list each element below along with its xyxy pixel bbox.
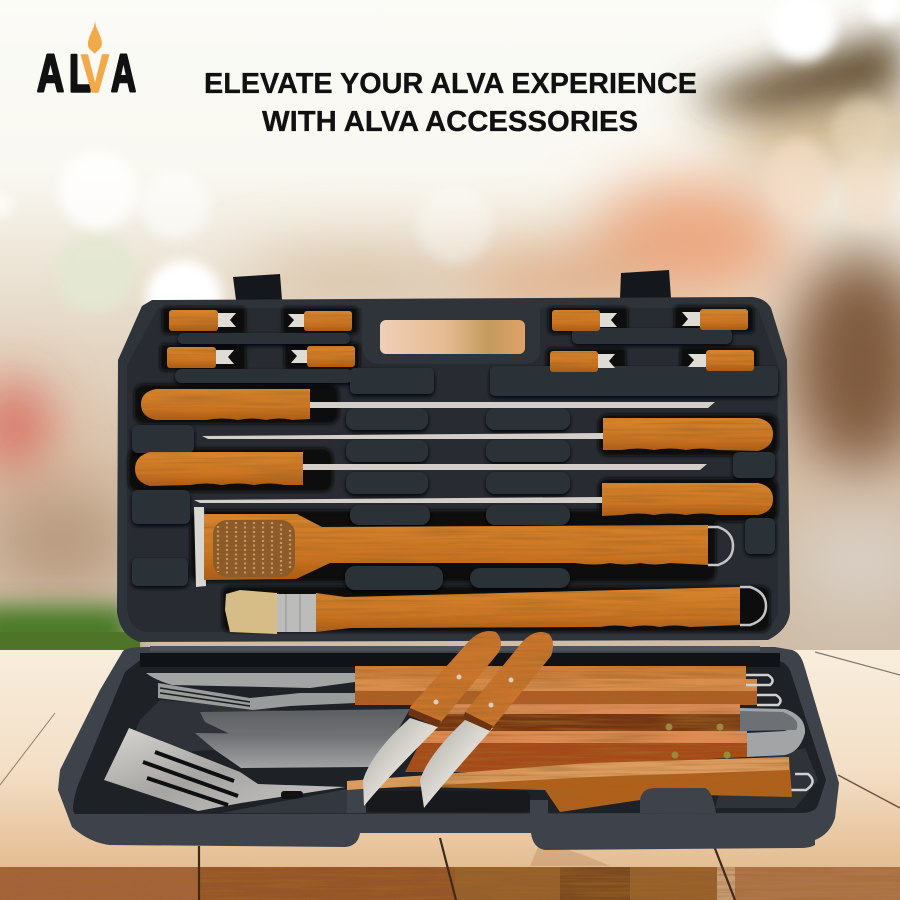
knife blade left (363, 718, 438, 806)
handle cut-out (380, 320, 525, 354)
tray front ledge (221, 789, 347, 813)
title: WITH ALVA ACCESSORIES (262, 106, 638, 138)
tray hinge bar (150, 646, 760, 651)
skewer rods (194, 402, 715, 503)
brush handle (204, 514, 708, 580)
logo: L (69, 44, 91, 104)
grill brush (194, 507, 733, 587)
lid clips (233, 270, 671, 300)
metal ferrule (277, 594, 316, 632)
tongs upper (200, 709, 410, 735)
scraper blade (194, 507, 206, 587)
skewers (135, 389, 773, 516)
basting handle (316, 587, 740, 632)
logo: A (111, 44, 136, 104)
corn holders (167, 309, 754, 372)
moulded tray supports (132, 328, 778, 590)
paring knives (363, 631, 553, 808)
logo: A (37, 44, 64, 104)
tray outer shell (58, 647, 839, 850)
knife bolsters (408, 708, 493, 731)
rivets (434, 674, 514, 708)
knife handle right (465, 632, 553, 727)
knife blade right (420, 720, 493, 808)
tray inner well (73, 659, 826, 814)
tongs loop (740, 708, 805, 757)
metal tools (104, 666, 813, 820)
skewer handles (135, 389, 773, 516)
handle rivets (666, 724, 730, 758)
holder metal tips (216, 312, 706, 368)
turner handle (347, 757, 792, 812)
title: ELEVATE YOUR ALVA EXPERIENCE (204, 68, 697, 100)
tray upper rim shadow (140, 653, 780, 667)
basting hook (740, 587, 766, 625)
carving knife (146, 673, 355, 688)
fork (158, 683, 355, 710)
knife handle left (410, 631, 501, 722)
table front edge (0, 867, 900, 900)
wooden table (0, 650, 900, 900)
open case: lower tray (58, 631, 839, 850)
tool handles wood (355, 666, 757, 772)
tongs lower (195, 733, 395, 768)
basting brush (225, 587, 766, 634)
logo flame (88, 21, 102, 54)
lid shell (117, 297, 790, 642)
lid inner tray (127, 308, 778, 632)
logo: V (81, 44, 109, 104)
open case: upper lid (117, 270, 790, 642)
holder handles (167, 309, 754, 372)
blurred bokeh background (0, 0, 900, 656)
wire hooks (746, 675, 813, 790)
logo (37, 21, 136, 104)
title (204, 68, 697, 138)
brass bristles (213, 520, 295, 577)
bristles (225, 590, 277, 634)
brush hook (708, 527, 733, 565)
black tray wells (128, 306, 778, 632)
spatula (104, 728, 345, 811)
tray floor panels (125, 700, 818, 808)
